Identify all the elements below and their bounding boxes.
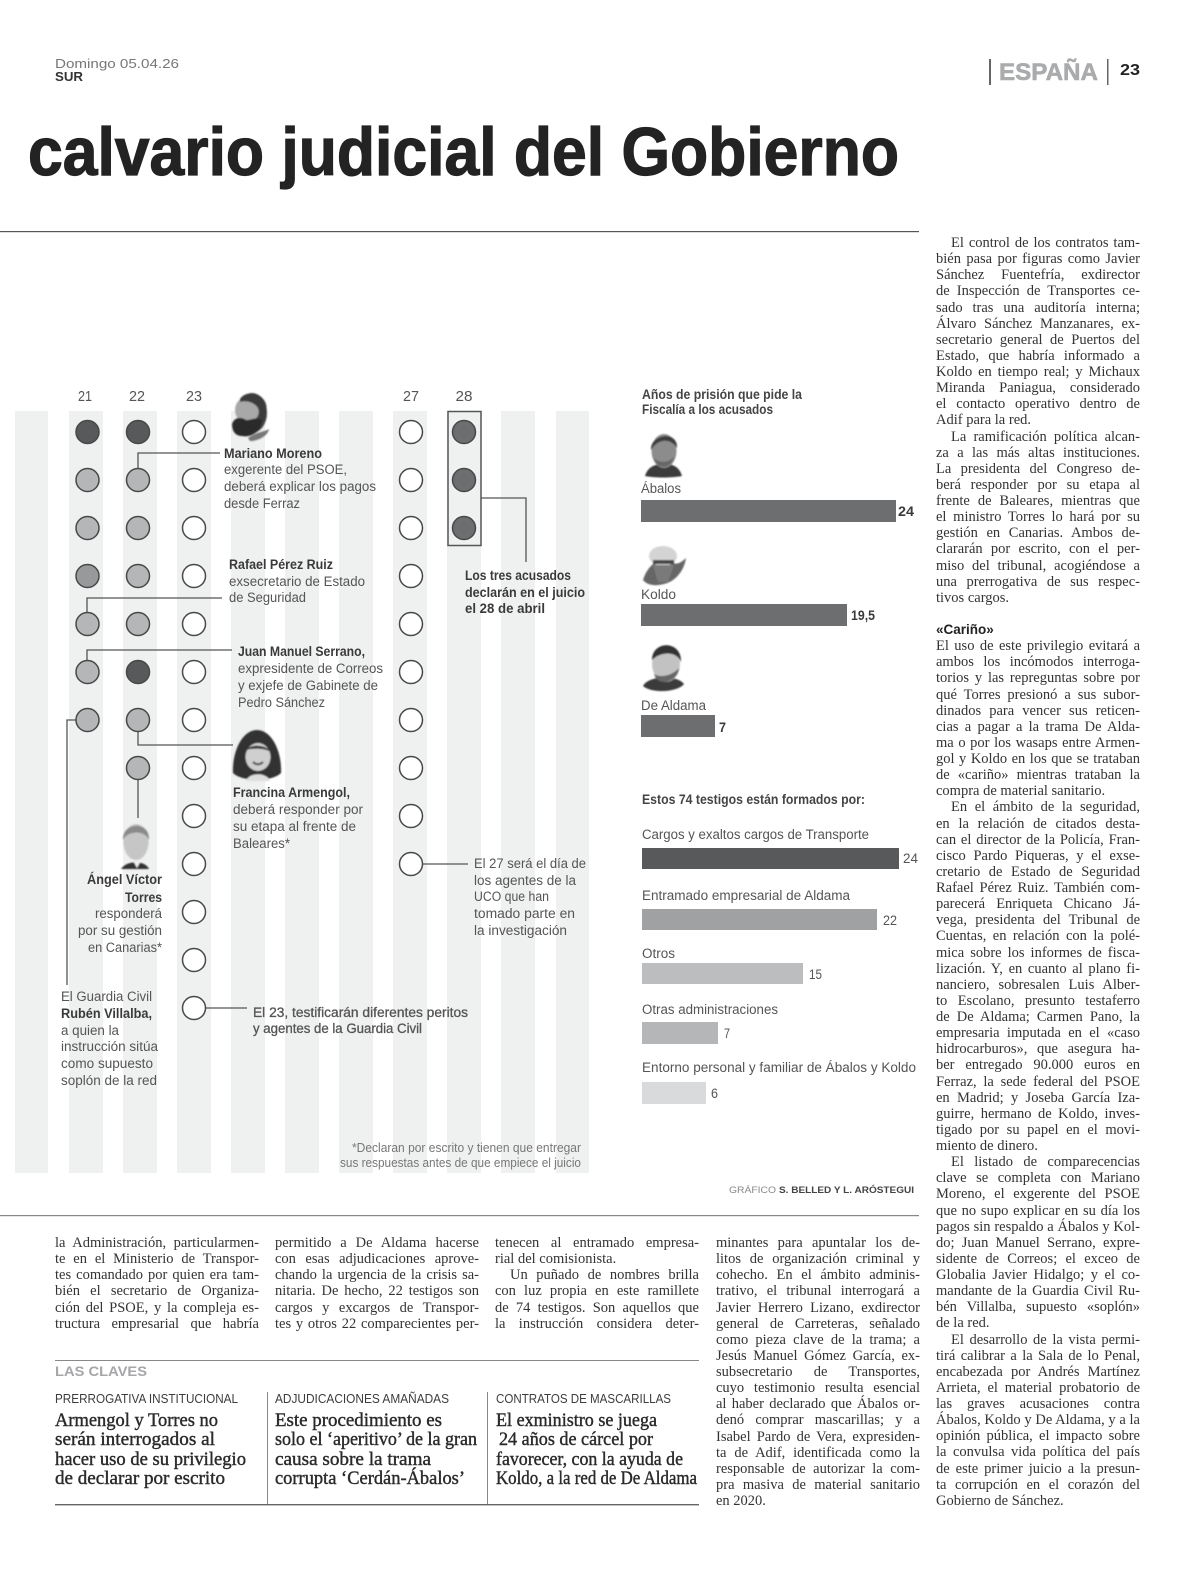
key: adjudicaciones amañadas: causa sobre la trama	[275, 1450, 431, 1470]
text block: bottom column 2: chando la urgencia de la crisis sa-	[275, 1267, 479, 1283]
witnesses day 27	[400, 420, 422, 876]
callout: three accused: declarán en el juicio	[465, 585, 585, 600]
text block: right column: clararán por escrito, con el per-	[936, 541, 1140, 557]
text block: right column: Gobierno de Sánchez.	[936, 1493, 1064, 1509]
text block: bottom column 4: ta de Adif, identificada como la	[716, 1445, 920, 1461]
text block: right column: bién pasa por figuras como Javier	[936, 251, 1140, 267]
text block: right column: Arrieta, el material probatorio de	[936, 1380, 1140, 1396]
callout: Ángel Víctor Torres: en Canarias*	[88, 940, 163, 955]
text block: right column: hidrocarburos», que asegura ha-	[936, 1041, 1140, 1057]
key: contratos de mascarillas: El exministro se juega	[496, 1411, 657, 1431]
text block: right column: do; Juan Manuel Serrano, expre-	[936, 1235, 1140, 1251]
text block: bottom column 3: la instrucción considera deter-	[495, 1316, 699, 1332]
text block: right column: ta corrupción en el corazón del	[936, 1477, 1140, 1493]
footnote: *Declaran por escrito y tienen que entregar	[352, 1141, 581, 1155]
text block: right column: ambos los incómodos interroga-	[936, 654, 1140, 670]
section tag and page number: ESPAÑA	[999, 58, 1098, 86]
callout: Rubén Villalba: Rubén Villalba,	[61, 1006, 152, 1021]
callout: Rubén Villalba: El Guardia Civil	[61, 989, 152, 1004]
text block: right column: una prerrogativa de sus respec-	[936, 574, 1140, 590]
key: adjudicaciones amañadas: ADJUDICACIONES AMAÑADAS	[275, 1391, 449, 1406]
text block: right column: gol y Koldo en los que se trataban	[936, 751, 1140, 767]
callout: Francina Armengol: su etapa al frente de	[233, 819, 356, 834]
text block: right column: ma o por los wasaps entre Armen-	[936, 735, 1140, 751]
text block: right column: dinados para vencer sus reticen-	[936, 703, 1140, 719]
text block: right column: vega, presidenta del Tribunal de	[936, 912, 1140, 928]
text block: bottom column 4: al haber declarado que Ábalos or-	[716, 1396, 920, 1412]
text block: right column: en Madrid; y Joseba García Iza-	[936, 1090, 1140, 1106]
callout: day 27 UCO agents: la investigación	[474, 923, 567, 938]
text block: right column: El desarrollo de la vista permi-	[951, 1332, 1140, 1348]
text block: right column: miso del tribunal, acogiéndose a	[936, 558, 1140, 574]
text block: bottom column 1	[55, 1235, 259, 1332]
text block: right column: sado tras una auditoría interna;	[936, 300, 1140, 316]
witnesses day 21	[76, 420, 99, 732]
connector lines	[67, 453, 526, 1008]
portrait: Koldo	[643, 546, 686, 585]
text block: right column: de este primer juicio a la presun-	[936, 1460, 1140, 1476]
text block: right column: gestión en Canarias. Ambos de-	[936, 525, 1140, 541]
callout: Rafael Pérez Ruiz	[229, 557, 365, 605]
text block: right column: de la red.	[936, 1315, 990, 1331]
text block: right column: que no supo explicar en su día los	[936, 1202, 1140, 1218]
day labels: 22	[129, 388, 145, 405]
text block: right column: El control de los contratos tam-	[951, 235, 1140, 251]
callout: Rafael Pérez Ruiz: Rafael Pérez Ruiz	[229, 557, 333, 572]
bar chart: witnesses: 6	[711, 1086, 718, 1101]
text block: right column: tigado por su papel en el movi-	[936, 1122, 1140, 1138]
text block: right column: Koldo en tiempo real; y Michaux	[936, 364, 1140, 380]
graphic credit: S. BELLED Y L. ARÓSTEGUI	[779, 1184, 914, 1196]
text block: right column: clave se completa con Mariano	[936, 1170, 1140, 1186]
text block: right column: cisco Pardo Piqueras, y el exse-	[936, 848, 1140, 864]
bar chart: witnesses: Cargos y exaltos cargos de Transporte	[642, 827, 869, 842]
portrait: De Aldama	[643, 645, 684, 691]
text block: bottom column 4: pra masiva de material sanitario	[716, 1477, 920, 1493]
text block: bottom column 4: litos de organización criminal y	[716, 1251, 920, 1267]
text block: bottom column 3: rial del comisionista.	[495, 1251, 616, 1267]
text block: bottom column 4: como pieza clave de la trama; a	[716, 1332, 920, 1348]
text block: right column: La ramificación política alcan-	[951, 428, 1140, 444]
text block: right column: opinión pública, el impacto sobre	[936, 1428, 1140, 1444]
day labels: 21	[78, 388, 92, 405]
text block: bottom column 1: tes comandado por quien era tam-	[55, 1267, 259, 1283]
callout: Mariano Moreno: Mariano Moreno	[224, 446, 322, 461]
text block: right column: Miranda Paniagua, considerado	[936, 380, 1140, 396]
text block: bottom column 1: te en el Ministerio de Transpor-	[55, 1251, 259, 1267]
day labels	[78, 388, 472, 405]
graphic credit	[729, 1184, 914, 1196]
bar chart: prison years: 19,5	[851, 608, 875, 623]
text block: right column: Adif para la red.	[936, 412, 1031, 428]
text block: right column: ber entregado 90.000 euros en	[936, 1057, 1140, 1073]
header date and newspaper: SUR	[55, 69, 84, 84]
text block: right column: qué Torres presionó a sus subor-	[936, 686, 1140, 702]
callout: Mariano Moreno	[224, 446, 376, 511]
text block: right column: «Cariño»	[936, 622, 994, 637]
text block: bottom column 4: cuyo testimonio resulta esencial	[716, 1380, 920, 1396]
header date and newspaper	[55, 56, 179, 84]
text block: right column: la convulsa vida política del país	[936, 1444, 1140, 1460]
bar chart: witnesses: Otras administraciones	[642, 1002, 778, 1017]
key: prerrogativa institucional: Armengol y Torres no	[55, 1411, 218, 1431]
header date and newspaper: Domingo 05.04.26	[55, 56, 179, 71]
bar chart: prison years: 24	[898, 504, 915, 519]
text block: bottom column 1: bién el secretario de Organiza-	[55, 1283, 259, 1299]
bar chart: prison years: 7	[719, 720, 726, 735]
callout: Ángel Víctor Torres: Torres	[125, 890, 162, 905]
text block: right column: cretario de Estado de Seguridad	[936, 864, 1140, 880]
text block: right column: compra de material sanitario.	[936, 783, 1105, 799]
callout: three accused: Los tres acusados	[465, 568, 571, 583]
bar chart: witnesses: 24	[903, 851, 918, 866]
text block: right column: tirá calibrar a la Sala de lo Penal,	[936, 1348, 1140, 1364]
callout: Rubén Villalba: como supuesto	[61, 1056, 153, 1071]
key: adjudicaciones amañadas: Este procedimiento es	[275, 1411, 442, 1431]
text block: right column: Ferraz, la sede federal del PSOE	[936, 1074, 1140, 1090]
callout: Ángel Víctor Torres: Ángel Víctor	[87, 872, 163, 887]
key: contratos de mascarillas: 24 años de cárcel por	[499, 1430, 653, 1450]
day labels: 28	[456, 388, 472, 405]
text block: bottom column 1: tructura empresarial que habría	[55, 1316, 259, 1332]
text block: right column: encabezada por Andrés Martínez	[936, 1364, 1140, 1380]
las claves heading: LAS CLAVES	[55, 1363, 147, 1379]
callout: Rubén Villalba: instrucción sitúa	[61, 1039, 158, 1054]
text block: bottom column 4: Jesús Manuel Gómez García, ex-	[716, 1348, 920, 1364]
callout: day 23 experts: El 23, testificarán diferentes peritos	[253, 1005, 468, 1020]
callout: Francina Armengol: Francina Armengol,	[233, 785, 350, 800]
text block: bottom column 1: ción del PSOE, y la compleja es-	[55, 1300, 259, 1316]
text block: right column: Álvaro Sánchez Manzanares, ex-	[936, 316, 1140, 332]
day labels: 23	[186, 388, 202, 405]
bar chart: witnesses: 7	[724, 1026, 730, 1041]
text block: right column: nanciero, sobresalen Luis Alber-	[936, 977, 1140, 993]
callout: three accused	[465, 568, 585, 616]
text block: bottom column 3: de 74 testigos. Son aquellos que	[495, 1300, 699, 1316]
footnote: sus respuestas antes de que empiece el juicio	[340, 1156, 581, 1170]
callout: Rubén Villalba: a quien la	[61, 1023, 119, 1038]
callout: Juan Manuel Serrano: Juan Manuel Serrano,	[238, 644, 365, 659]
accused on day 28	[448, 412, 481, 546]
text block: bottom column 3	[495, 1235, 699, 1332]
text block: right column: za a las más altas instituciones.	[936, 445, 1140, 461]
portrait: Ángel Víctor Torres	[121, 824, 149, 869]
key: prerrogativa institucional: serán interrogados al	[55, 1430, 215, 1450]
key: contratos de mascarillas: CONTRATOS DE MASCARILLAS	[496, 1391, 671, 1406]
key: adjudicaciones amañadas	[275, 1391, 477, 1489]
callout: Mariano Moreno: deberá explicar los pagos	[224, 479, 376, 494]
bar chart: witnesses: 15	[809, 967, 822, 982]
callout: Mariano Moreno: desde Ferraz	[224, 496, 300, 511]
bar chart: witnesses: Entorno personal y familiar de Ábalos y Koldo	[642, 1060, 916, 1075]
bar chart: prison years: De Aldama	[641, 698, 706, 713]
callout: day 27 UCO agents: UCO que han	[474, 889, 549, 904]
text block: bottom column 2: tes y otros 22 comparecientes per-	[275, 1316, 479, 1332]
text block: bottom column 4: trativo, el tribunal interrogará a	[716, 1283, 920, 1299]
text block: right column: frente de Baleares, mientras que	[936, 493, 1140, 509]
callout: Francina Armengol	[233, 785, 363, 851]
text block: bottom column 3: tenecen al entramado empresa-	[495, 1235, 699, 1251]
text block: right column: parecerá Enriqueta Chicano Já-	[936, 896, 1140, 912]
key: contratos de mascarillas	[496, 1391, 697, 1489]
key: contratos de mascarillas: favorecer, con la ayuda de	[496, 1450, 683, 1470]
text block: right column: Globalia Javier Hidalgo; y el co-	[936, 1267, 1140, 1283]
text block: right column: pagos sin respaldo a Ábalos y Kol-	[936, 1219, 1140, 1235]
text block: right column: secretario general de Puertos del	[936, 332, 1140, 348]
text block: bottom column 4: minantes para apuntalar los de-	[716, 1235, 920, 1251]
callout: Juan Manuel Serrano: expresidente de Correos	[238, 661, 383, 676]
text block: bottom column 2: permitido a De Aldama hacerse	[275, 1235, 479, 1251]
callout: Rafael Pérez Ruiz: exsecretario de Estado	[229, 574, 365, 589]
key: adjudicaciones amañadas: solo el ‘aperitivo’ de la gran	[275, 1430, 477, 1450]
text block: bottom column 4	[716, 1235, 920, 1509]
bar chart: prison years: Ábalos	[641, 481, 681, 496]
callout: Juan Manuel Serrano	[238, 644, 383, 710]
text block: bottom column 2: cargos y excargos de Transpor-	[275, 1300, 479, 1316]
callout: day 27 UCO agents: tomado parte en	[474, 906, 575, 921]
timeline background stripes	[15, 411, 589, 1173]
witnesses day 23	[182, 420, 206, 1020]
callout: Ángel Víctor Torres	[78, 872, 163, 955]
bar chart: prison years	[641, 387, 915, 737]
text block: right column: berá responder por su etapa al	[936, 477, 1140, 493]
text block: right column: torios y las repreguntas sobre por	[936, 670, 1140, 686]
graphic credit: GRÁFICO	[729, 1185, 776, 1196]
bar chart: prison years: Koldo	[641, 587, 676, 602]
bar chart: witnesses	[642, 792, 918, 1104]
key: adjudicaciones amañadas: corrupta ‘Cerdán-Ábalos’	[275, 1467, 465, 1489]
text block: bottom column 4: general de Carreteras, señalado	[716, 1316, 920, 1332]
text block: right column: mica sobre los informes de fisca-	[936, 944, 1140, 960]
text block: right column: en la relación de citados desta-	[936, 816, 1140, 832]
portrait: Mariano Moreno	[232, 393, 269, 441]
text block: right column: cias a pagar a la trama De Alda-	[936, 719, 1140, 735]
text block: right column: Sánchez Fuentefría, exdirector	[936, 267, 1140, 283]
callout: three accused: el 28 de abril	[465, 601, 545, 616]
text block: right column: can el director de la Policía, Fran-	[936, 832, 1140, 848]
portrait: Francina Armengol	[233, 730, 281, 781]
text block: bottom column 4: subsecretario de Transportes,	[716, 1364, 920, 1380]
portrait: Ábalos	[645, 434, 682, 478]
key: prerrogativa institucional: PRERROGATIVA INSTITUCIONAL	[55, 1391, 238, 1406]
key: prerrogativa institucional: hacer uso de su privilegio	[55, 1450, 246, 1470]
bar chart: witnesses: 22	[883, 913, 897, 928]
key: prerrogativa institucional: de declarar por escrito	[55, 1469, 225, 1489]
text block: right column: El listado de comparecencias	[951, 1154, 1140, 1170]
text block: right column: sidente de Correos; el exceo de	[936, 1251, 1140, 1267]
text block: right column: guirre, hermano de Koldo, inves-	[936, 1106, 1140, 1122]
chart heading: Fiscalía a los acusados	[642, 402, 773, 417]
panel: las claves	[55, 1360, 699, 1505]
text block: bottom column 4: Isabel Pardo de Vera, expresiden-	[716, 1428, 920, 1444]
text block: right column: bén Villalba, supuesto «soplón»	[936, 1299, 1140, 1315]
callout: Juan Manuel Serrano: Pedro Sánchez	[238, 695, 325, 710]
callout: Rafael Pérez Ruiz: de Seguridad	[229, 590, 306, 605]
text block: bottom column 4: en 2020.	[716, 1493, 766, 1509]
callout: day 27 UCO agents: los agentes de la	[474, 873, 576, 888]
footnote	[340, 1141, 581, 1170]
text block: right column: de Inspección de Transportes ce-	[936, 283, 1140, 299]
bar chart: witnesses: Entramado empresarial de Aldama	[642, 888, 850, 903]
text block: bottom column 3: Un puñado de nombres brilla	[510, 1267, 699, 1283]
callout: Rubén Villalba	[61, 989, 158, 1088]
text block: right column: de De Aldama; Carmen Pano, la	[936, 1009, 1140, 1025]
text block: bottom column 2: con esas adjudicaciones aprove-	[275, 1251, 479, 1267]
callout: day 27 UCO agents	[474, 856, 586, 938]
text block: right column: lización. Y, en cuanto al plano fi-	[936, 961, 1140, 977]
text block: right column: empresaria imputada en el «caso	[936, 1025, 1140, 1041]
callout: Ángel Víctor Torres: responderá	[95, 906, 162, 921]
chart heading	[642, 387, 802, 417]
text block: right column: el ministro Torres lo hará por su	[936, 509, 1140, 525]
text block: right column: to Escolano, presunto testaferro	[936, 993, 1140, 1009]
callout: Francina Armengol: deberá responder por	[233, 802, 363, 817]
text block: right column: La presidenta del Congreso de-	[936, 461, 1140, 477]
text block: right column: Cuentas, en relación con la polé-	[936, 928, 1140, 944]
chart heading: Estos 74 testigos están formados por:	[642, 792, 865, 807]
key: prerrogativa institucional	[55, 1391, 246, 1489]
text block: bottom column 3: con luz propia en este ramillete	[495, 1283, 699, 1299]
text block: right column: En el ámbito de la seguridad,	[951, 799, 1140, 815]
title: calvario judicial del Gobierno	[28, 114, 899, 190]
text block: right column: Moreno, el exgerente del PSOE	[936, 1186, 1140, 1202]
callout: day 23 experts	[253, 1005, 468, 1036]
text block: right column	[936, 235, 1140, 1509]
callout: Mariano Moreno: exgerente del PSOE,	[224, 462, 347, 477]
callout: day 23 experts: y agentes de la Guardia Civil	[253, 1021, 422, 1036]
text block: right column: Estado, que habría informado a	[936, 348, 1140, 364]
text block: bottom column 2: nitaria. De hecho, 22 testigos son	[275, 1283, 479, 1299]
text block: bottom column 2	[275, 1235, 479, 1332]
text block: bottom column 1: la Administración, particularmen-	[55, 1235, 259, 1251]
text block: right column: de «cariño» mientras trataban la	[936, 767, 1140, 783]
callout: Rubén Villalba: soplón de la red	[61, 1073, 157, 1088]
section tag and page number: 23	[1120, 62, 1140, 79]
callout: Ángel Víctor Torres: por su gestión	[78, 923, 162, 938]
chart heading: Años de prisión que pide la	[642, 387, 802, 402]
text block: bottom column 4: Javier Herrero Lizano, exdirector	[716, 1300, 920, 1316]
text block: right column: las graves acusaciones contra	[936, 1396, 1140, 1412]
text block: bottom column 4: cohecho. En el ámbito adminis-	[716, 1267, 920, 1283]
day labels: 27	[403, 388, 419, 405]
text block: bottom column 4: denó comprar mascarillas; y a	[716, 1412, 920, 1428]
section tag and page number	[989, 58, 1140, 86]
bar chart: witnesses: Otros	[642, 946, 675, 961]
witnesses day 22	[126, 420, 150, 780]
text block: right column: mandante de la Guardia Civil Ru-	[936, 1283, 1140, 1299]
text block: right column: el contacto operativo dentro de	[936, 396, 1140, 412]
text block: right column: tivos cargos.	[936, 590, 1009, 606]
callout: day 27 UCO agents: El 27 será el día de	[474, 856, 586, 871]
text block: right column: Ábalos, Koldo y De Aldama, y a la	[936, 1412, 1140, 1428]
text block: bottom column 4: responsable de autorizar la com-	[716, 1461, 920, 1477]
text block: right column: El uso de este privilegio evitará a	[936, 638, 1140, 654]
text block: right column: miento de dinero.	[936, 1138, 1038, 1154]
text block: right column: Rafael Pérez Ruiz. También com-	[936, 880, 1140, 896]
callout: Francina Armengol: Baleares*	[233, 836, 291, 851]
callout: Juan Manuel Serrano: y exjefe de Gabinete de	[238, 678, 378, 693]
key: contratos de mascarillas: Koldo, a la red de De Aldama	[496, 1469, 697, 1489]
